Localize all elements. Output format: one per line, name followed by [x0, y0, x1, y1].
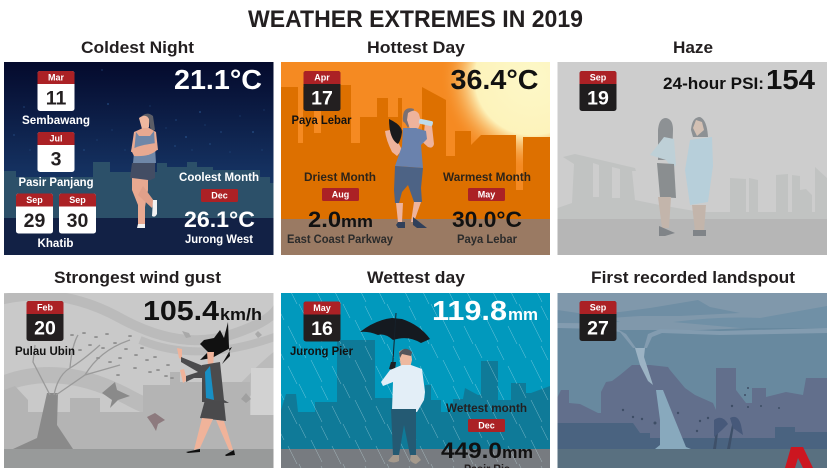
badge: Dec [201, 189, 238, 202]
calendar: Feb 20: Feb [37, 302, 53, 312]
logo: red A mark [785, 447, 813, 468]
calendar: Mar 11: 11 [46, 88, 66, 110]
calendar: Jul 3 [38, 132, 74, 172]
badge: May [468, 188, 505, 201]
label: Sembawang: Sembawang [22, 115, 90, 127]
value: 26.1°C: 26.1°C [184, 207, 255, 232]
calendar: Jul 3: Jul [49, 134, 63, 144]
value: 449.0 mm [441, 438, 533, 463]
label: Warmest Month: Warmest Month [443, 172, 531, 184]
palm trees [713, 417, 743, 449]
label: Jurong West: Jurong West [185, 234, 253, 246]
calendar: Apr 17: 17 [311, 88, 333, 110]
value: 30.0°C: 30.0°C [452, 207, 522, 232]
calendar: Feb 20: 20 [34, 318, 56, 340]
value: 2.0mm: 2.0mm [308, 207, 373, 232]
value: 449.0 mm: 449.0 [441, 438, 502, 463]
figure: man with umbrella [360, 313, 430, 464]
label: Pulau Ubin: Pulau Ubin [15, 346, 75, 358]
sun [448, 62, 550, 162]
calendar: Mar 11 [38, 71, 74, 111]
value: 24-hour PSI 154 [663, 64, 815, 95]
label: Jurong Pier: Jurong Pier [290, 346, 354, 358]
city skyline [281, 340, 550, 449]
calendar: Sep 29 [16, 194, 53, 234]
city skyline [4, 162, 274, 220]
panel: hottest day [281, 38, 550, 255]
ground [281, 219, 550, 255]
figure: woman in wind [177, 322, 235, 456]
light building [251, 368, 274, 415]
distant buildings [4, 372, 274, 449]
calendar: May 16: 16 [311, 318, 333, 340]
night sky background [4, 62, 274, 255]
heading: strongest wind gust: Strongest wind gust [54, 268, 221, 287]
value: 119.8 mm: mm [508, 305, 538, 324]
blue-grey background [558, 293, 827, 468]
value: 119.8 mm: 119.8 [432, 295, 507, 326]
orange background [281, 62, 550, 255]
heading: wettest day: Wettest day [367, 268, 466, 287]
badge: Dec: Dec [211, 190, 228, 200]
calendar: Mar 11: Mar [48, 72, 64, 82]
calendar: Sep 19: 19 [587, 88, 609, 110]
calendar: Jul 3: 3 [51, 148, 62, 170]
calendar: May 16: May [313, 303, 331, 313]
heading: haze: Haze [673, 38, 713, 57]
figure: woman drinking with fan [385, 108, 434, 228]
calendar: Apr 17: Apr [314, 72, 330, 82]
blowing leaves [102, 331, 262, 431]
stars [14, 70, 264, 152]
city skyline [281, 85, 550, 219]
value: 105.4 km/h [143, 295, 262, 326]
tree [13, 332, 174, 449]
badge: Aug [322, 188, 359, 201]
calendar: Sep 27: 27 [587, 318, 609, 340]
foreground band [558, 423, 827, 449]
calendar: Sep 27: Sep [590, 302, 607, 312]
panel: first recorded landspout [558, 268, 827, 468]
wind bands [0, 295, 286, 414]
label: Driest Month: Driest Month [304, 172, 376, 184]
ground [4, 449, 274, 468]
landspout funnel [635, 348, 691, 449]
value: 449.0 mm: mm [502, 443, 533, 462]
calendar: Sep 19 [580, 71, 616, 111]
ground [281, 449, 550, 468]
city skyline [558, 365, 827, 449]
calendar: Sep 29: 29 [24, 210, 45, 232]
value: 36.4°C: 36.4°C [450, 64, 538, 95]
heading: first recorded landspout: First recorded landspout [591, 268, 795, 287]
ground [4, 218, 274, 255]
badge: Aug: Aug [332, 190, 349, 200]
figure: shivering woman [130, 114, 158, 228]
label: Coolest Month: Coolest Month [179, 172, 259, 184]
figure: two women in haze [650, 117, 713, 236]
calendar: Feb 20 [26, 301, 64, 341]
rain [281, 293, 550, 468]
blue background [281, 293, 550, 468]
badge: May: May [478, 190, 495, 200]
value: 21.1°C: 21.1°C [174, 64, 262, 95]
badge: Dec [468, 419, 505, 432]
value: 24-hour PSI 154: 154 [766, 64, 815, 95]
label: Paya Lebar month: Paya Lebar [457, 234, 518, 246]
panel: coldest night [4, 38, 274, 255]
heading: hottest day: Hottest Day [367, 38, 466, 57]
value: 105.4 km/h: km/h [220, 305, 262, 324]
calendar: Sep 29: Sep [26, 195, 43, 205]
label: East Coast Parkway: East Coast Parkway [287, 234, 394, 246]
ground [558, 219, 827, 255]
badge: Dec: Dec [478, 420, 495, 430]
ground [558, 449, 827, 468]
calendar: Sep 30: 30 [67, 210, 88, 232]
value: 24-hour PSI 154: 24-hour PSI: [663, 75, 764, 93]
label: Wettest month: Wettest month [446, 403, 527, 415]
panel: haze [558, 38, 827, 255]
calendar: Sep 27 [580, 301, 616, 341]
calendar: Sep 30: Sep [69, 195, 86, 205]
heading: coldest night: Coldest Night [81, 38, 194, 57]
calendar: Sep 30 [59, 194, 96, 234]
label: Pasir Panjang: Pasir Panjang [18, 177, 94, 189]
hazy skyline [558, 154, 827, 220]
grey background [558, 62, 827, 255]
label: Paya Lebar: Paya Lebar [292, 115, 352, 127]
title: WEATHER EXTREMES IN 2019 [248, 6, 583, 33]
value: 119.8 mm [432, 295, 538, 326]
label: Khatib: Khatib [38, 238, 74, 250]
calendar: Apr 17 [304, 71, 340, 111]
panel: strongest wind gust [0, 268, 286, 468]
grey background [4, 293, 274, 468]
storm clouds [558, 293, 827, 348]
calendar: May 16 [304, 302, 340, 342]
calendar: Sep 19: Sep [590, 72, 607, 82]
value: 105.4 km/h: 105.4 [143, 295, 219, 326]
panel: wettest day [281, 268, 550, 468]
flying debris [622, 387, 780, 432]
